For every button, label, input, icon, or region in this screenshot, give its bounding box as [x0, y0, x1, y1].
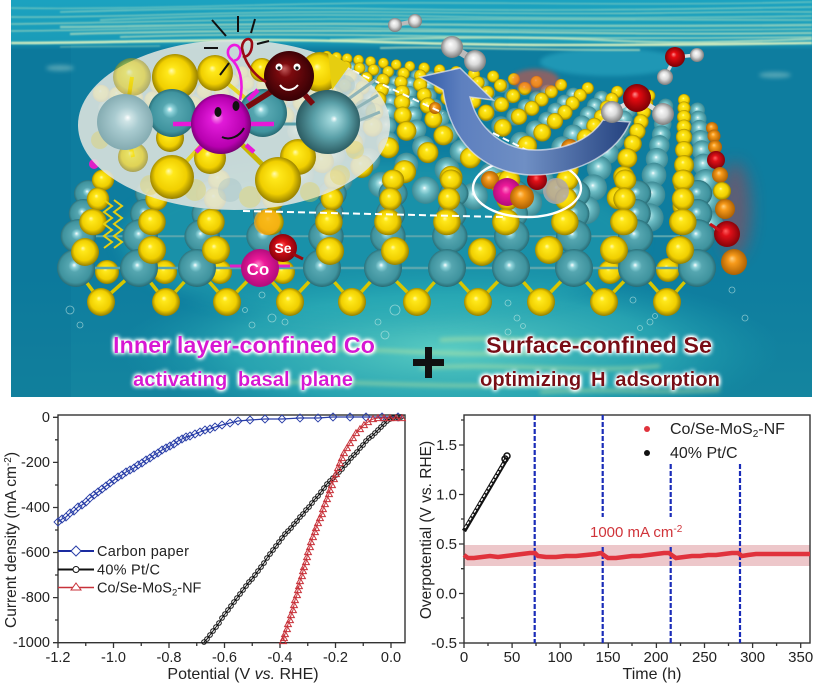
left chart x tick labels: -1.2	[46, 650, 70, 666]
caption: surface Se: optimizing H adsorption	[480, 369, 720, 391]
curve: Co/Se-MoS2-NF	[283, 418, 402, 641]
current density annotation: -2	[673, 524, 683, 535]
left chart x tick labels: 0.0	[381, 650, 401, 666]
curve: carbon paper	[58, 417, 398, 522]
left chart legend: Co/Se-MoS	[97, 580, 172, 596]
chart: LSV current density vs potential	[3, 410, 405, 683]
series: 40% Pt/C stability	[464, 453, 510, 531]
right chart shaded band	[464, 545, 810, 566]
right chart x tick labels: 250	[692, 649, 717, 666]
water background	[11, 0, 812, 435]
left chart x tick labels: -0.8	[156, 650, 182, 666]
front row with lower sulfur layer	[57, 236, 716, 316]
right chart legend	[644, 421, 785, 462]
right chart y tick labels: 0.5	[436, 536, 457, 553]
magenta hint at left lattice edge	[89, 159, 99, 169]
left chart y tick labels: 0	[42, 410, 50, 426]
right chart x tick labels: 300	[740, 649, 765, 666]
faded atoms seen through lens	[91, 75, 376, 208]
left chart y tick labels: -800	[21, 590, 50, 606]
magenta and maroon curls	[228, 39, 266, 100]
lens front sulfur atoms	[150, 155, 301, 203]
lens bonds	[127, 76, 380, 166]
right chart y axis title: Overpotential (V vs. RHE)	[418, 441, 435, 619]
dashed zoom guide lines	[243, 66, 540, 217]
left chart legend: -NF	[177, 580, 202, 596]
left chart x axis title: Potential (V vs. RHE)	[167, 666, 319, 683]
left chart y axis title: -2	[3, 457, 14, 466]
left chart legend: 2	[172, 588, 177, 598]
right chart x axis title: Time (h)	[623, 666, 681, 683]
right chart x tick labels: 350	[788, 649, 813, 666]
left chart y tick labels: -400	[21, 500, 50, 516]
right chart legend: 40% Pt/C	[670, 445, 738, 462]
left chart x tick labels: -1.0	[101, 650, 126, 666]
hydrogen molecule far	[388, 14, 422, 32]
left chart axes	[53, 415, 405, 648]
left chart x tick labels: -0.2	[323, 650, 348, 666]
left chart legend: 40% Pt/C	[97, 562, 160, 578]
left chart legend	[58, 544, 202, 598]
magnified lens view	[78, 16, 390, 210]
water molecule small	[657, 47, 704, 85]
right chart legend: -NF	[758, 421, 785, 438]
curve: 40% Pt/C	[204, 417, 401, 642]
back red-orange Se patch	[429, 69, 579, 157]
right chart legend: 2	[753, 429, 759, 440]
left chart y axis title: )	[3, 452, 20, 457]
left chart legend: Carbon paper	[97, 544, 189, 560]
series: Co/Se-MoS2-NF stability	[464, 553, 810, 558]
right chart y tick labels: 1.0	[436, 486, 457, 504]
right chart x tick labels: 0	[460, 649, 468, 666]
happy Se atom	[247, 51, 314, 107]
maintenance dashed lines	[535, 415, 740, 643]
left chart y tick labels: -600	[21, 545, 50, 561]
caption: inner layer Co: activating basal plane	[133, 369, 353, 391]
orange tinted sulfur above Co	[254, 209, 280, 235]
left chart y tick labels: -1000	[13, 635, 50, 651]
left chart y axis title: Current density (mA cm	[3, 466, 20, 628]
Co atom label: Co	[247, 260, 269, 279]
Se atom label	[269, 234, 303, 262]
right chart x tick labels: 150	[595, 649, 621, 666]
right edge orange and red Se atoms	[706, 122, 747, 275]
white ring	[473, 159, 581, 217]
MoS2 lattice rows	[0, 49, 727, 316]
right chart x tick labels: 50	[504, 649, 520, 666]
left chart x tick labels: -0.4	[268, 650, 292, 666]
mesh of background bonds	[104, 200, 122, 248]
left chart x tick labels	[46, 650, 401, 666]
right chart x tick labels: 200	[643, 649, 669, 666]
caption: surface Se: Surface-confined Se	[486, 332, 712, 358]
lens ellipse	[78, 40, 390, 210]
middle rows filling the centre of the surface	[300, 134, 723, 232]
lens sulfur atoms	[113, 52, 350, 175]
chart: stability overpotential vs time	[418, 415, 813, 683]
right chart legend: Co/Se-MoS	[670, 421, 753, 438]
left chart y tick labels	[13, 410, 50, 651]
right chart y tick labels: -0.5	[431, 635, 457, 652]
excitement rays	[204, 16, 269, 75]
panel: MoS2 catalyst illustration underwater	[0, 0, 812, 435]
caption: inner layer Co: Inner layer-confined Co	[113, 332, 375, 358]
left chart x tick labels: -0.6	[212, 650, 237, 666]
right chart axes	[459, 415, 810, 648]
bubbles	[66, 287, 748, 339]
Co atom label	[230, 249, 290, 287]
Se atom label: Se	[274, 240, 292, 256]
plus sign	[413, 347, 444, 378]
right chart y tick labels: 1.5	[436, 437, 457, 454]
happy Co atom	[173, 90, 274, 154]
right chart y tick labels	[431, 437, 457, 652]
right chart x tick labels	[460, 649, 813, 666]
current density annotation: 1000 mA cm	[590, 524, 673, 541]
right chart y tick labels: 0.0	[436, 586, 457, 602]
caption: surface Se	[480, 332, 720, 391]
right chart x tick labels: 100	[547, 649, 573, 666]
lens molybdenum atoms	[97, 89, 360, 154]
caption: inner layer Co	[113, 332, 375, 391]
water molecule large	[601, 84, 674, 125]
red glow around surface Se edge	[719, 162, 751, 258]
left chart y tick labels: -200	[21, 455, 50, 471]
highlighted active site inside white ring	[481, 170, 569, 209]
curved blue arrow	[420, 68, 630, 175]
hydrogen molecule near arrow tip	[441, 36, 486, 72]
